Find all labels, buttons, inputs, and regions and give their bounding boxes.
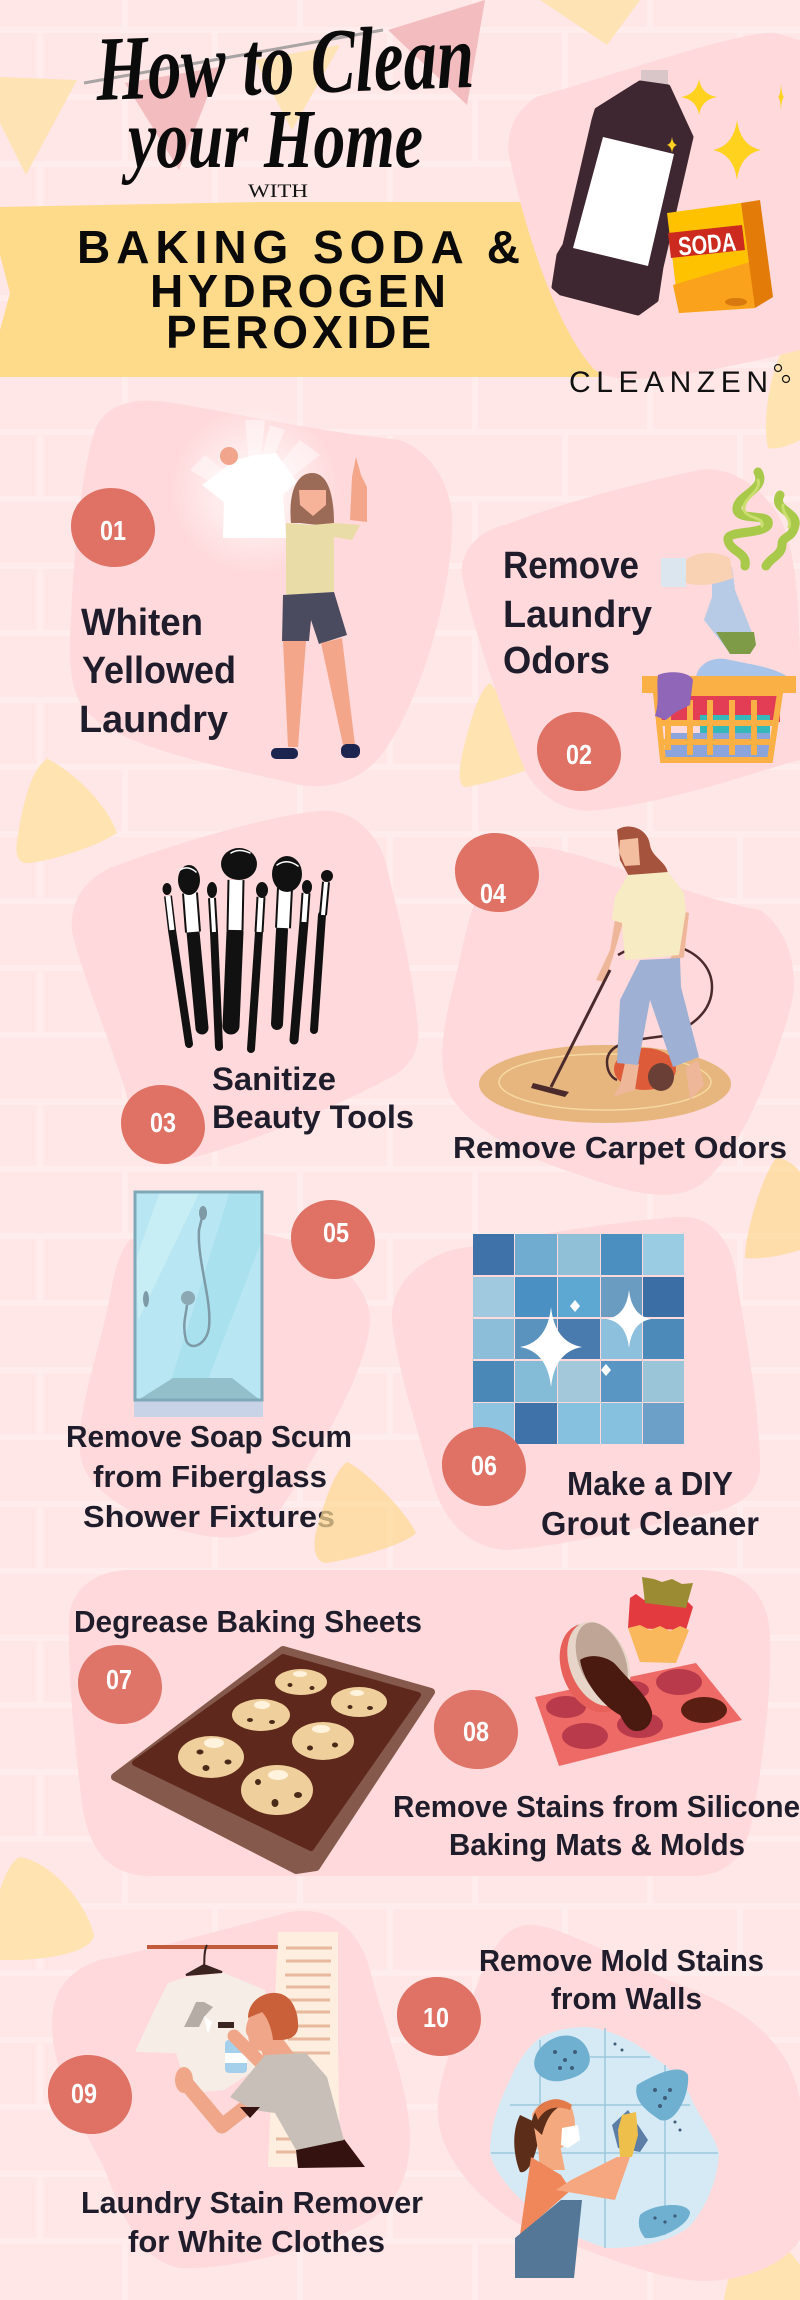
illustration: woman cleaning moldy wall bbox=[490, 2027, 719, 2278]
badge 04: 04 bbox=[480, 878, 506, 909]
badge 02 bbox=[537, 712, 621, 791]
panel: 03 sanitize beauty tools bbox=[72, 811, 418, 1164]
label 05: Remove Soap Scum bbox=[66, 1419, 352, 1454]
title bbox=[93, 5, 475, 186]
label 10: from Walls bbox=[551, 1981, 702, 2016]
subtitle: baking soda and hydrogen peroxide bbox=[77, 221, 520, 358]
subtitle: baking soda and hydrogen peroxide: PEROXIDE bbox=[166, 306, 431, 358]
label 10: Remove Mold Stains bbox=[479, 1943, 764, 1978]
panel: 10 remove mold stains bbox=[397, 1925, 800, 2281]
title: How to Clean bbox=[93, 5, 475, 120]
label 01 bbox=[79, 602, 236, 741]
label 02: Odors bbox=[503, 640, 610, 682]
panel: 07 and 08 baking bbox=[69, 1570, 800, 1876]
label 05: from Fiberglass bbox=[93, 1459, 327, 1494]
panel: 02 remove laundry odors bbox=[462, 470, 800, 811]
label 01: Whiten bbox=[81, 602, 203, 644]
label 02: Remove bbox=[503, 545, 639, 587]
label 09: for White Clothes bbox=[128, 2224, 385, 2259]
icon: hydrogen peroxide bottle bbox=[554, 70, 691, 313]
subtitle: baking soda and hydrogen peroxide: BAKING SODA & bbox=[77, 221, 520, 273]
label 02: Laundry bbox=[503, 594, 652, 636]
yellow title banner bbox=[0, 202, 600, 377]
label 06 bbox=[541, 1465, 759, 1542]
badge 04 bbox=[455, 833, 539, 912]
logo: cleanzen: CLEANZEN bbox=[569, 366, 768, 399]
badge 08: 08 bbox=[463, 1716, 489, 1747]
panel: 04 remove carpet odors bbox=[442, 826, 794, 1195]
illustration: glass shower bbox=[134, 1191, 263, 1417]
subtitle: baking soda and hydrogen peroxide: HYDROGEN bbox=[150, 265, 446, 317]
label 10 bbox=[479, 1943, 764, 2016]
panel: 09 laundry stain remover bbox=[48, 1911, 423, 2268]
badge 03: 03 bbox=[150, 1107, 176, 1138]
panel: 01 whiten yellowed laundry bbox=[70, 401, 452, 786]
badge 05: 05 bbox=[323, 1217, 349, 1248]
panel: header blob bbox=[508, 33, 800, 379]
icon: soda box bbox=[667, 200, 773, 313]
label 09: Laundry Stain Remover bbox=[81, 2185, 423, 2220]
illustration: laundry basket bbox=[642, 659, 796, 760]
badge 08 bbox=[434, 1690, 518, 1769]
badge 07 bbox=[78, 1645, 162, 1724]
illustration: makeup brushes bbox=[162, 848, 333, 1049]
label 03: Beauty Tools bbox=[212, 1099, 414, 1135]
panel: 05 remove soap scum bbox=[66, 1191, 375, 1537]
panel: 06 diy grout cleaner bbox=[392, 1217, 760, 1550]
label 02 bbox=[503, 545, 652, 682]
label 04: Remove Carpet Odors bbox=[453, 1130, 787, 1165]
badge 09 bbox=[48, 2055, 132, 2134]
icon: soda box: SODA bbox=[677, 227, 737, 261]
label 09 bbox=[81, 2185, 423, 2259]
label 08: Baking Mats & Molds bbox=[449, 1827, 745, 1862]
illustration: woman spraying stained shirt bbox=[135, 1932, 365, 2168]
illustration: silicone mold and chocolate bowl bbox=[535, 1577, 742, 1766]
icon: sparkles bbox=[667, 79, 784, 180]
illustration: hand holding sock bbox=[661, 553, 756, 654]
label 06: Grout Cleaner bbox=[541, 1505, 759, 1542]
badge 10 bbox=[397, 1977, 481, 2056]
badge 05 bbox=[291, 1200, 375, 1279]
label 05 bbox=[66, 1419, 352, 1534]
badge 09: 09 bbox=[71, 2078, 97, 2109]
title: your Home bbox=[121, 93, 423, 186]
illustration: stink lines bbox=[728, 472, 795, 566]
badge 01: 01 bbox=[100, 515, 126, 546]
badge 06 bbox=[442, 1427, 526, 1506]
pale yellow shape at right edge bbox=[745, 1158, 800, 1258]
badge 01 bbox=[71, 488, 155, 567]
label 07: Degrease Baking Sheets bbox=[74, 1604, 422, 1639]
label 03 bbox=[212, 1061, 414, 1135]
illustration: baking sheet with cookies bbox=[115, 1650, 431, 1870]
badge 06: 06 bbox=[471, 1450, 497, 1481]
badge 07: 07 bbox=[106, 1664, 132, 1695]
label 06: Make a DIY bbox=[567, 1465, 733, 1502]
bunting decoration bbox=[0, 0, 640, 175]
label 08 bbox=[393, 1789, 800, 1862]
badge 10: 10 bbox=[423, 2002, 449, 2033]
label 01: Yellowed bbox=[82, 650, 236, 692]
label 01: Laundry bbox=[79, 699, 228, 741]
label 03: Sanitize bbox=[212, 1061, 336, 1097]
illustration: woman holding white shirt bbox=[170, 405, 367, 759]
pale yellow shape overlapping label bbox=[315, 1462, 416, 1563]
illustration: woman vacuuming rug bbox=[479, 826, 731, 1123]
label 05: Shower Fixtures bbox=[83, 1499, 335, 1534]
with label: WITH bbox=[248, 181, 308, 202]
badge 02: 02 bbox=[566, 739, 592, 770]
badge 03 bbox=[121, 1085, 205, 1164]
illustration: blue tiles with sparkles bbox=[473, 1234, 684, 1444]
